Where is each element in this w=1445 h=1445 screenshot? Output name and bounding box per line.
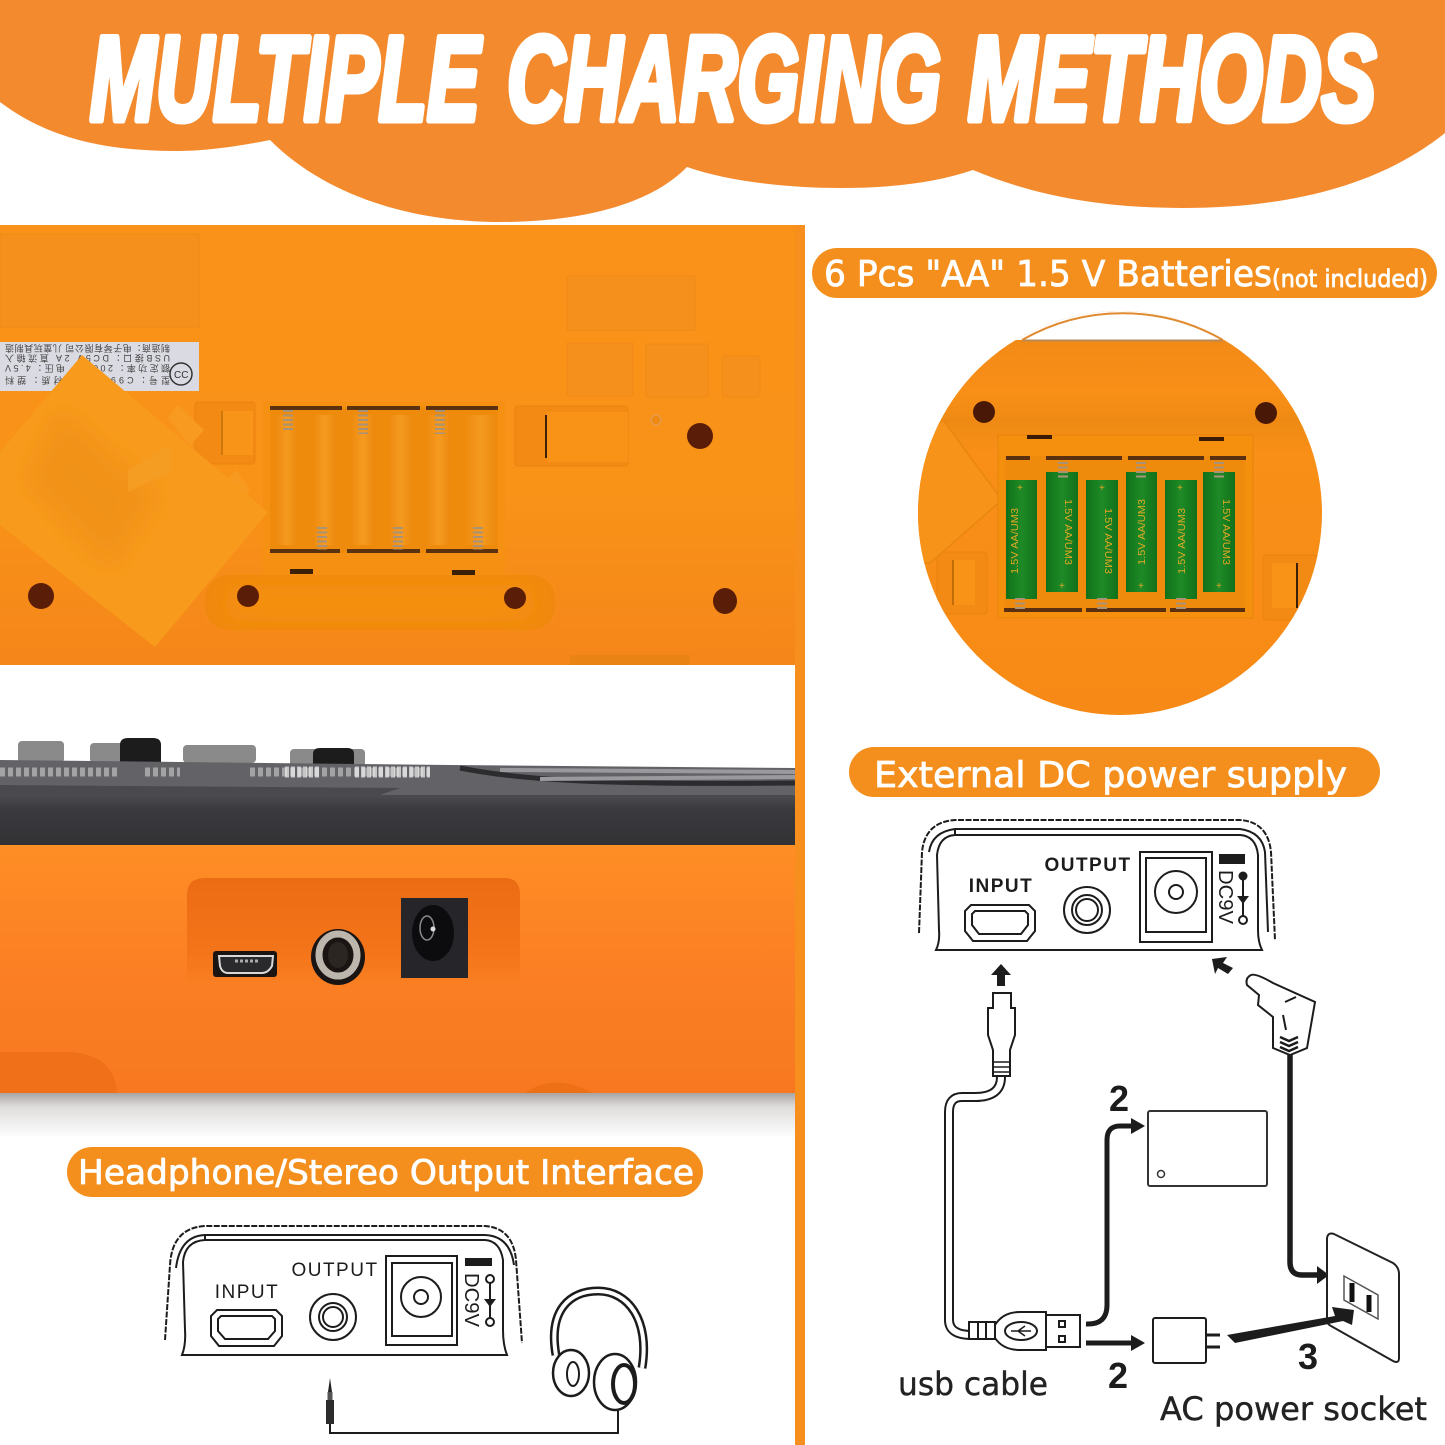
AA batteries: 1.5V AA/UM3: [1102, 508, 1114, 574]
top screw holes: [973, 401, 1277, 424]
left latch: [937, 552, 987, 614]
arrow: usb to battery pack: [1086, 1118, 1145, 1324]
OUTPUT label: OUTPUT: [291, 1260, 379, 1281]
rating label: [0, 342, 199, 391]
AA batteries: 1.5V AA/UM3: [1009, 508, 1021, 574]
arrow: usb to charger: [1086, 1335, 1145, 1351]
INPUT label: INPUT: [969, 876, 1033, 897]
left battery cover: [918, 421, 998, 564]
battery compartment: [998, 435, 1253, 618]
power plug and cord: [1246, 975, 1329, 1284]
panel: keyboard side with ports: [0, 738, 795, 1138]
DC jack: [1140, 852, 1212, 942]
right slide latch: [515, 406, 628, 466]
embossed rectangles: [0, 234, 760, 397]
heading pill: batteries: 6 Pcs "AA" 1.5 V Batteries: [824, 254, 1272, 295]
DC9V polarity: [1214, 854, 1249, 925]
usb A plug: [969, 1312, 1080, 1350]
removed battery cover: [0, 355, 268, 647]
rating label: 制造商：电子琴有限公司 儿童玩具制造: [5, 343, 170, 354]
arrow: charger to socket: [1227, 1307, 1354, 1343]
screw holes: [28, 423, 737, 614]
diagram: external power supply: [898, 820, 1427, 1428]
headphone jack: [311, 929, 365, 985]
arrow: up into input: [991, 964, 1011, 986]
AA batteries: 1.5V AA/UM3: [1220, 499, 1232, 565]
usb cable: [949, 993, 1080, 1350]
arrow: into DC jack: [1212, 957, 1233, 974]
diagram: headphone output connection: [165, 1226, 644, 1433]
label: usb cable: usb cable: [898, 1365, 1048, 1403]
AA batteries: +: [1017, 483, 1023, 494]
AA batteries: +: [1099, 483, 1105, 494]
INPUT label: INPUT: [215, 1282, 279, 1303]
step number 2: 2: [1109, 1078, 1129, 1119]
AA batteries: 1.5V AA/UM3: [1062, 499, 1074, 565]
title: CHARGING: [507, 12, 941, 146]
DC9V polarity: [460, 1258, 496, 1328]
audio plug and wire: [326, 1378, 618, 1433]
orange side body: [0, 845, 795, 1093]
AA batteries: 1.5V AA/UM3: [1176, 508, 1188, 574]
label: AC power socket: AC power socket: [1160, 1390, 1427, 1428]
floor shadow: [0, 1093, 795, 1138]
circular photo: installed batteries: [918, 311, 1322, 715]
DC power jack: [401, 898, 468, 978]
top surface and dark trim: [0, 760, 795, 800]
rating label: 额定功率：200mW 电压：4.5V: [5, 363, 170, 374]
port panel outline: [919, 820, 1275, 950]
heading pill: batteries: [812, 248, 1437, 298]
port panel outline: [165, 1226, 522, 1355]
right latch: [1263, 555, 1318, 620]
AA batteries: 1.5V AA/UM3: [1136, 499, 1148, 565]
AA batteries: [1006, 472, 1235, 599]
rating label: CC: [174, 370, 188, 381]
title banner: orange cloud: [0, 0, 1445, 222]
bottom notch: [570, 655, 690, 665]
heading pill: headphone output: Headphone/Stereo Output Interface: [78, 1153, 694, 1193]
AA batteries: +: [1177, 483, 1183, 494]
step number 3: 3: [1298, 1336, 1318, 1377]
icon: headphones: [553, 1291, 644, 1410]
OUTPUT label: OUTPUT: [1044, 855, 1132, 876]
battery compartment, empty: [263, 402, 505, 575]
DC9V polarity: DC9V: [460, 1273, 482, 1328]
AA batteries: +: [1059, 581, 1065, 592]
panel: keyboard underside with battery compartment: [0, 225, 795, 665]
heading pill: batteries: (not included): [1272, 265, 1428, 293]
left slide latch: [195, 402, 255, 464]
AA batteries: +: [1216, 581, 1222, 592]
HDMI style port: [965, 905, 1035, 941]
output jack: [1064, 887, 1110, 933]
micro usb port: [213, 951, 277, 977]
step number 2: 2: [1108, 1355, 1128, 1396]
title: MULTIPLE: [90, 12, 483, 146]
DC9V polarity: DC9V: [1214, 870, 1236, 925]
output jack: [310, 1294, 356, 1340]
keyboard buttons: [18, 738, 365, 768]
rating label: USB接口：DC5V 2A 直流输入: [5, 353, 170, 364]
rating label: 型号：C999-2JN 材质：塑料: [5, 375, 170, 386]
icon: USB charger: [1153, 1318, 1220, 1363]
heading pill: DC power: External DC power supply: [874, 755, 1347, 796]
title: [90, 12, 1376, 146]
groove with screw holes: [205, 575, 555, 630]
icon: battery pack: [1148, 1111, 1267, 1186]
vertical orange divider: [795, 225, 805, 1445]
HDMI style port: [211, 1310, 282, 1346]
circle thin outline, top arc: [1022, 313, 1223, 340]
AA batteries: +: [1138, 581, 1144, 592]
DC jack: [386, 1256, 457, 1345]
icon: wall socket: [1327, 1234, 1399, 1362]
port recess: [187, 878, 520, 985]
